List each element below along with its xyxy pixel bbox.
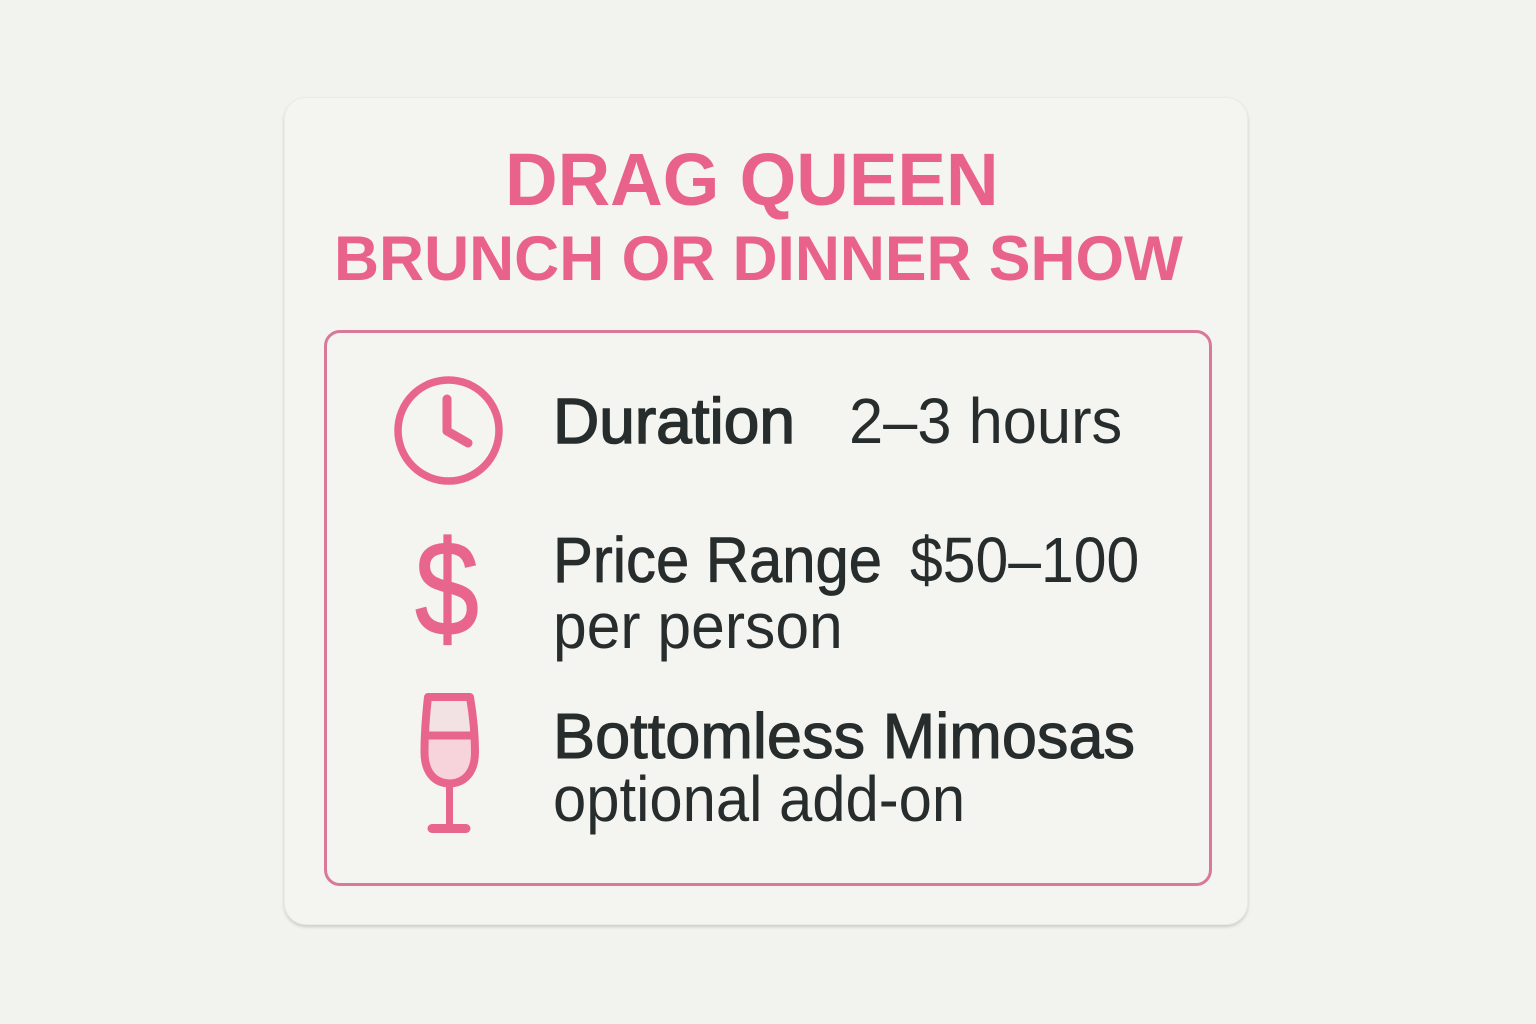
- icon: dollar sign: $: [415, 513, 479, 664]
- title line 1: DRAG QUEEN: [505, 138, 999, 221]
- icon: wine glass: [420, 693, 479, 833]
- panel: card: [284, 97, 1248, 925]
- text: price range: Price Range: [553, 524, 882, 596]
- text: bottomless mimosas: Bottomless Mimosas: [553, 700, 1135, 772]
- text: optional add-on: optional add-on: [553, 763, 965, 835]
- panel: details box: [324, 330, 1212, 886]
- text: duration: Duration: [553, 385, 795, 457]
- text: duration value: 2–3 hours: [849, 385, 1122, 457]
- title line 2: BRUNCH OR DINNER SHOW: [334, 224, 1183, 294]
- text: price value: $50–100: [910, 524, 1139, 596]
- icon: clock: [394, 376, 503, 485]
- text: per person: per person: [553, 590, 843, 662]
